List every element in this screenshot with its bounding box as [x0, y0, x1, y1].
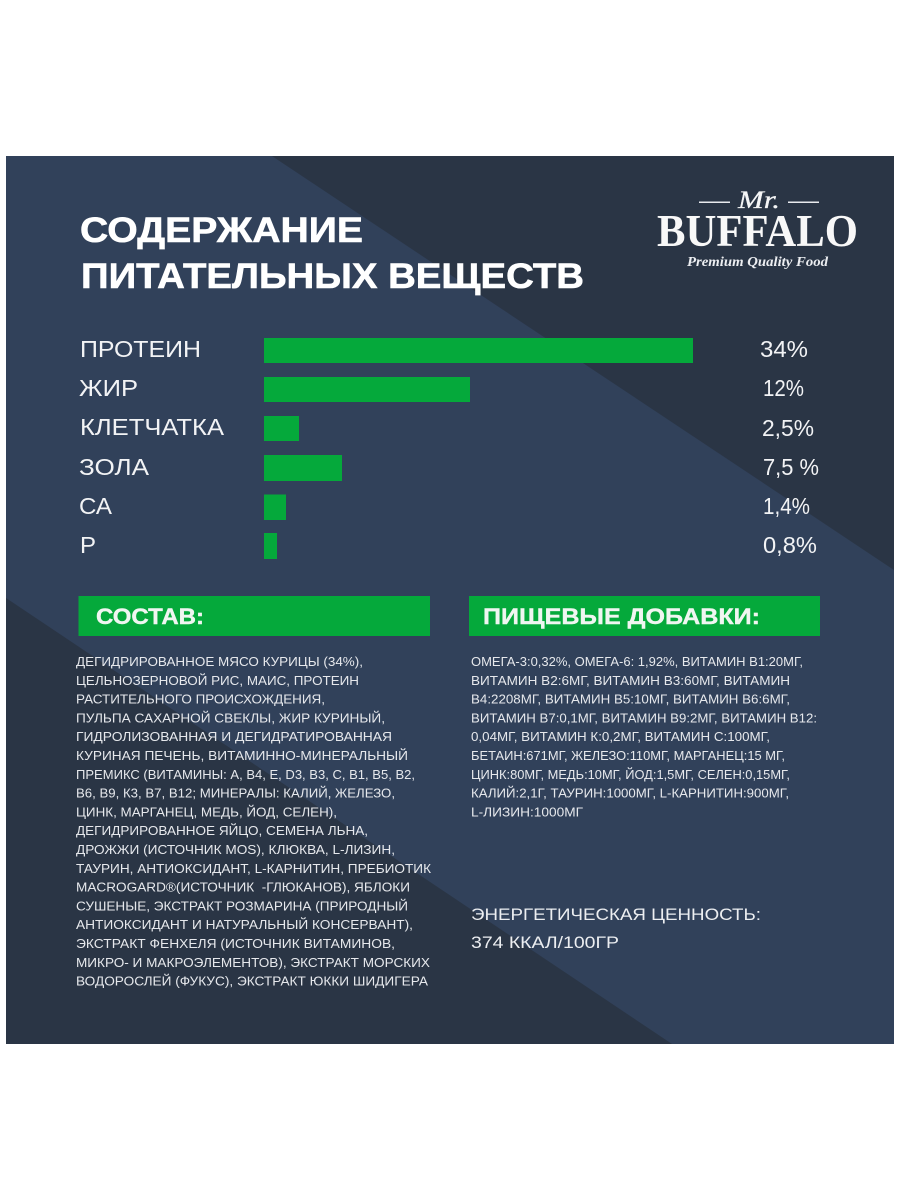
row: ash: ЗОЛА — [79, 454, 150, 480]
text block: composition — [76, 654, 431, 989]
text block: composition: ЦЕЛЬНОЗЕРНОВОЙ РИС, МАИС, ПРОТЕИН — [76, 673, 359, 688]
heading: food additives — [469, 596, 820, 636]
text block: additives: В4:2208МГ, ВИТАМИН В5:10МГ, ВИТАМИН В6:6МГ, — [471, 692, 790, 707]
row: protein — [80, 336, 808, 363]
row: protein: 34% — [760, 336, 808, 362]
text block: additives: ЦИНК:80МГ, МЕДЬ:10МГ, ЙОД:1,5МГ, СЕЛЕН:0,15МГ, — [471, 767, 790, 782]
logo: Mr. Buffalo — [657, 187, 858, 269]
bar chart: nutrients — [79, 336, 819, 559]
text block: additives: ВИТАМИН В7:0,1МГ, ВИТАМИН В9:2МГ, ВИТАМИН В12: — [471, 710, 817, 725]
text block: additives: 0,04МГ, ВИТАМИН К:0,2МГ, ВИТАМИН С:100МГ, — [471, 729, 770, 744]
text block: composition: MACROGARD®(ИСТОЧНИК -ГЛЮКАНОВ), ЯБЛОКИ — [76, 880, 410, 895]
row: fat — [79, 375, 804, 402]
text block: composition: ДЕГИДРИРОВАННОЕ ЯЙЦО, СЕМЕНА ЛЬНА, — [76, 823, 368, 838]
row: phosphorus — [80, 532, 817, 559]
text block: composition: ДЕГИДРИРОВАННОЕ МЯСО КУРИЦЫ (34%), — [76, 654, 363, 669]
text block: composition: ЦИНК, МАРГАНЕЦ, МЕДЬ, ЙОД, СЕЛЕН), — [76, 804, 337, 819]
text block: additives: БЕТАИН:671МГ, ЖЕЛЕЗО:110МГ, МАРГАНЕЦ:15 МГ, — [471, 748, 785, 763]
text block: energy value: 374 ККАЛ/100ГР — [471, 933, 619, 952]
row: fat: ЖИР — [79, 375, 138, 401]
row: calcium: СА — [79, 493, 113, 519]
text block: additives: ВИТАМИН В2:6МГ, ВИТАМИН В3:60МГ, ВИТАМИН — [471, 673, 790, 688]
text block: composition: СУШЕНЫЕ, ЭКСТРАКТ РОЗМАРИНА (ПРИРОДНЫЙ — [76, 898, 408, 913]
row: phosphorus: Р — [80, 532, 96, 558]
text block: composition: КУРИНАЯ ПЕЧЕНЬ, ВИТАМИННО-МИНЕРАЛЬНЫЙ — [76, 748, 408, 763]
row: fiber: КЛЕТЧАТКА — [80, 414, 225, 440]
heading: food additives: ПИЩЕВЫЕ ДОБАВКИ: — [483, 604, 760, 629]
text block: composition: ГИДРОЛИЗОВАННАЯ И ДЕГИДРАТИРОВАННАЯ — [76, 729, 392, 744]
text block: composition: ДРОЖЖИ (ИСТОЧНИК MOS), КЛЮКВА, L-ЛИЗИН, — [76, 842, 395, 857]
text block: additives: L-ЛИЗИН:1000МГ — [471, 804, 583, 819]
logo: Mr. Buffalo: BUFFALO — [657, 205, 858, 256]
text block: composition: АНТИОКСИДАНТ И НАТУРАЛЬНЫЙ КОНСЕРВАНТ), — [76, 917, 413, 932]
title: ПИТАТЕЛЬНЫХ ВЕЩЕСТВ — [81, 257, 584, 296]
row: fiber — [80, 414, 814, 441]
row: ash: 7,5 % — [763, 454, 819, 480]
heading: composition — [78, 596, 430, 636]
heading: composition: СОСТАВ: — [96, 604, 204, 629]
logo: Mr. Buffalo: Premium Quality Food — [687, 254, 828, 269]
title — [80, 211, 584, 296]
text block: energy value: ЭНЕРГЕТИЧЕСКАЯ ЦЕННОСТЬ: — [471, 905, 761, 924]
row: fat: 12% — [763, 375, 804, 401]
row: fiber: 2,5% — [762, 415, 814, 441]
row: ash — [79, 454, 819, 481]
row: calcium: 1,4% — [763, 493, 810, 519]
background panel — [6, 156, 894, 1044]
text block: additives: ОМЕГА-3:0,32%, ОМЕГА-6: 1,92%, ВИТАМИН В1:20МГ, — [471, 654, 803, 669]
text block: additives: КАЛИЙ:2,1Г, ТАУРИН:1000МГ, L-КАРНИТИН:900МГ, — [471, 786, 789, 801]
title: СОДЕРЖАНИЕ — [80, 211, 363, 250]
text block: composition: РАСТИТЕЛЬНОГО ПРОИСХОЖДЕНИЯ, — [76, 692, 325, 707]
text block: composition: ПРЕМИКС (ВИТАМИНЫ: А, В4, Е, D3, В3, С, В1, В5, В2, — [76, 767, 415, 782]
text block: energy value — [471, 905, 761, 952]
text block: composition: ЭКСТРАКТ ФЕНХЕЛЯ (ИСТОЧНИК ВИТАМИНОВ, — [76, 936, 395, 951]
text block: composition: ПУЛЬПА САХАРНОЙ СВЕКЛЫ, ЖИР КУРИНЫЙ, — [76, 710, 385, 725]
row: phosphorus: 0,8% — [763, 532, 817, 558]
text block: additives — [471, 654, 817, 819]
row: protein: ПРОТЕИН — [80, 336, 201, 362]
row: calcium — [79, 493, 810, 520]
text block: composition: ВОДОРОСЛЕЙ (ФУКУС), ЭКСТРАКТ ЮККИ ШИДИГЕРА — [76, 974, 428, 989]
text block: composition: ТАУРИН, АНТИОКСИДАНТ, L-КАРНИТИН, ПРЕБИОТИК — [76, 861, 431, 876]
text block: composition: В6, В9, К3, В7, В12; МИНЕРАЛЫ: КАЛИЙ, ЖЕЛЕЗО, — [76, 786, 395, 801]
logo: Mr. Buffalo: Mr. — [737, 187, 780, 214]
text block: composition: МИКРО- И МАКРОЭЛЕМЕНТОВ), ЭКСТРАКТ МОРСКИХ — [76, 955, 430, 970]
